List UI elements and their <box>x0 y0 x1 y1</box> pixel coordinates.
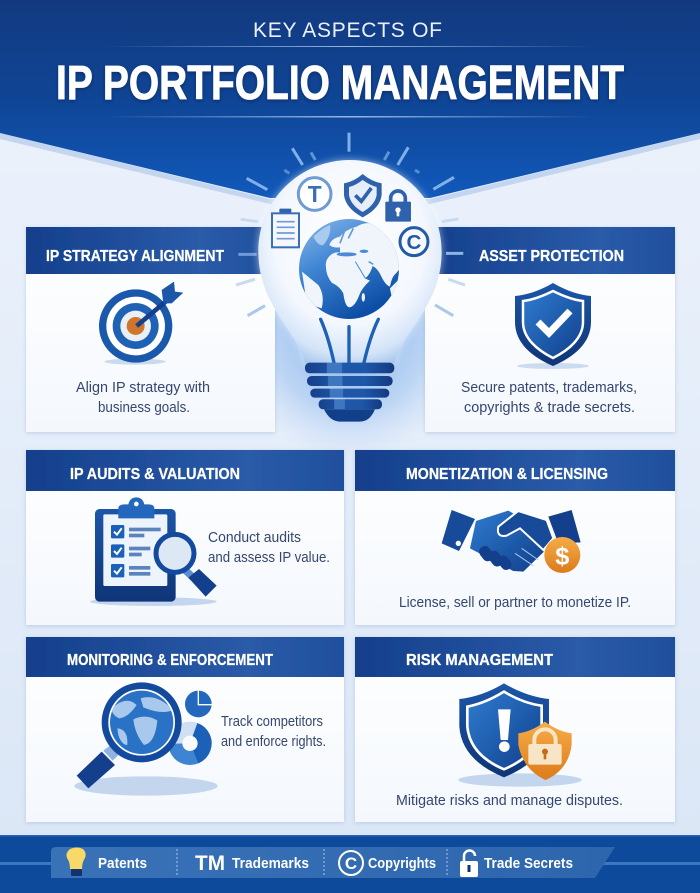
text: audits description <box>208 530 330 566</box>
panel: Asset Protection <box>425 227 675 432</box>
globe <box>299 219 402 319</box>
icon: padlock <box>385 191 411 222</box>
text: monitoring description: and enforce rights. <box>221 734 326 750</box>
icon: copyright: C <box>407 231 422 254</box>
text: protection description: copyrights & trade secrets. <box>464 400 635 416</box>
text: audits description: Conduct audits <box>208 530 301 546</box>
text: protection description: Secure patents, trademarks, <box>461 380 637 396</box>
legend bar <box>51 847 615 878</box>
heading: IP Strategy Alignment: IP STRATEGY ALIGNMENT <box>46 248 224 265</box>
footer band <box>0 835 700 893</box>
icon: light bulb with IP symbols <box>236 133 465 422</box>
legend: trademarks: Trademarks <box>232 856 309 872</box>
icon: handshake with coin: $ <box>555 542 569 570</box>
text: audits description: and assess IP value. <box>208 550 330 566</box>
heading: Asset Protection: ASSET PROTECTION <box>479 248 624 265</box>
text: strategy description: Align IP strategy with <box>76 380 210 396</box>
icon: shield with check <box>515 283 591 369</box>
glow behind light bulb <box>230 200 470 460</box>
filaments <box>321 319 378 363</box>
icon: clipboard and magnifier <box>90 497 217 606</box>
legend: trade secrets: Trade Secrets <box>484 856 573 872</box>
icon: warning shield with padlock shield <box>458 683 582 787</box>
legend: patents <box>66 848 147 876</box>
legend: trade secrets <box>460 850 573 877</box>
header banner <box>0 0 700 204</box>
legend: copyrights: C <box>345 854 357 873</box>
text: monitoring description <box>221 714 326 750</box>
bulb screw base <box>305 363 394 422</box>
icon: handshake with coin <box>442 510 581 573</box>
bulb halo <box>258 160 442 363</box>
text: strategy description: business goals. <box>98 400 190 416</box>
icon: copyright <box>400 228 428 256</box>
panel: IP Strategy Alignment <box>26 227 275 432</box>
bulb glass <box>258 160 442 363</box>
legend: trademarks: TM <box>195 852 225 875</box>
legend: patents: Patents <box>98 856 147 872</box>
text: risk description: Mitigate risks and manage disputes. <box>396 793 623 809</box>
icon: magnifier over globe with charts <box>74 686 218 796</box>
icon: trademark T circle <box>298 178 331 210</box>
text: monitoring description: Track competitors <box>221 714 323 730</box>
text: protection description <box>461 380 637 416</box>
icon: check shield <box>344 174 382 217</box>
legend: trademarks <box>195 852 309 875</box>
heading: Monitoring & Enforcement: MONITORING & ENFORCEMENT <box>67 652 273 669</box>
text: strategy description <box>76 380 210 416</box>
panel: Risk Management <box>355 637 675 822</box>
light rays <box>236 133 465 316</box>
panel: Monetization & Licensing <box>355 450 675 625</box>
legend: copyrights <box>339 851 436 875</box>
heading: Monetization & Licensing: MONETIZATION & LICENSING <box>406 466 608 483</box>
legend: copyrights: Copyrights <box>368 856 436 872</box>
icon: trademark T circle: T <box>308 181 322 207</box>
heading: Risk Management: RISK MANAGEMENT <box>406 652 554 669</box>
panel: IP Audits & Valuation <box>26 450 344 625</box>
icon: clipboard document <box>272 209 299 247</box>
icon: target with arrow <box>99 282 183 365</box>
eyebrow heading: KEY ASPECTS OF <box>253 19 442 42</box>
heading: IP Audits & Valuation: IP AUDITS & VALUATION <box>70 466 240 483</box>
text: monetization description: License, sell or partner to monetize IP. <box>399 595 631 611</box>
panel: Monitoring & Enforcement <box>26 637 344 822</box>
